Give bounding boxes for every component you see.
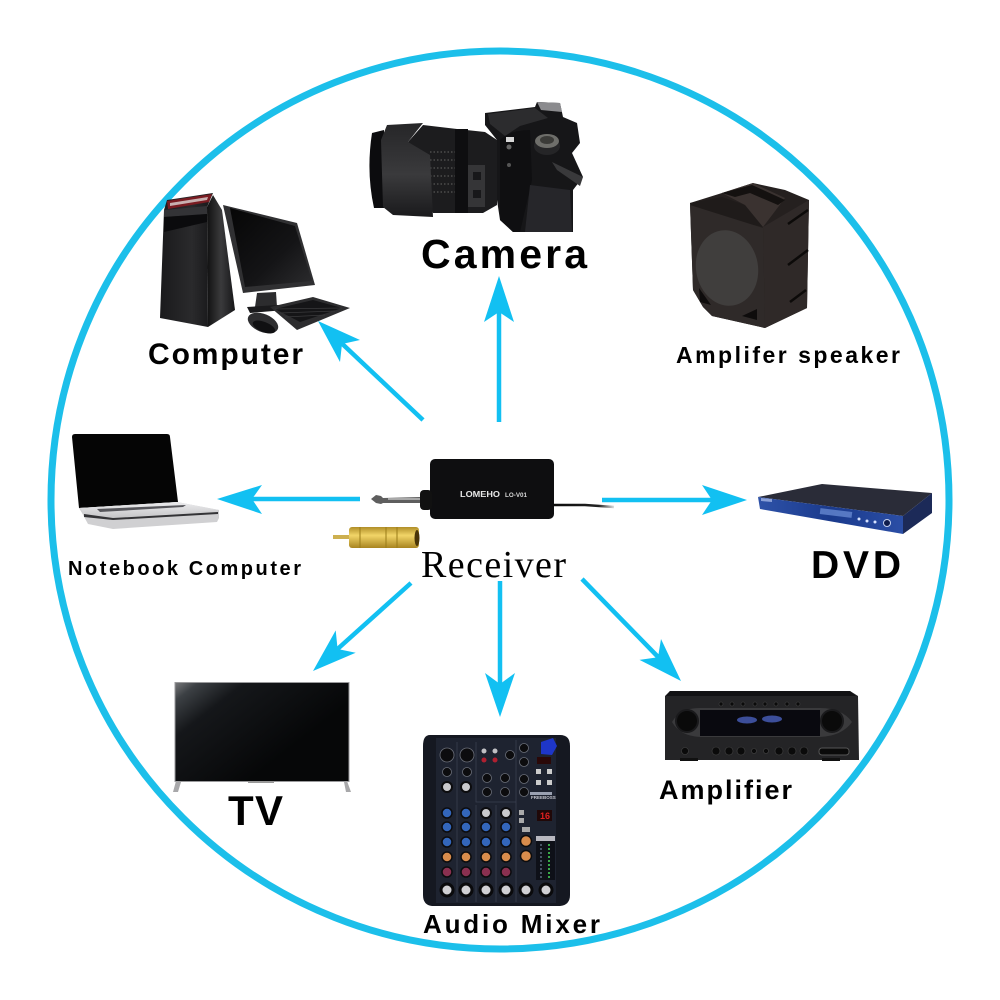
icon: audio mixer: FREEBOSS: [531, 795, 556, 800]
icon: receiver device: LOMEHO: [460, 489, 500, 499]
title: notebook computer: Notebook Computer: [68, 558, 301, 580]
title: TV: TV: [228, 787, 283, 834]
icon: receiver device: LO-V01: [505, 492, 527, 499]
title: receiver: Receiver: [421, 544, 566, 586]
icon: audio mixer: 16: [540, 811, 550, 821]
icon: notebook computer: [72, 434, 219, 529]
icon: TV: [173, 682, 351, 792]
title: DVD: DVD: [811, 544, 901, 587]
arrow: receiver to audio mixer: [485, 581, 515, 717]
icon: computer: [160, 193, 350, 337]
arrow: receiver to DVD: [602, 485, 747, 515]
icon: camera: [369, 102, 583, 232]
title: amplifer speaker: Amplifer speaker: [676, 342, 900, 368]
icon: receiver device: [371, 459, 614, 519]
arrow: receiver to amplifier: [582, 579, 681, 681]
arrow: receiver to TV: [313, 583, 411, 671]
title: audio mixer: Audio Mixer: [423, 909, 600, 939]
icon: audio mixer: [423, 735, 570, 906]
title: computer: Computer: [148, 338, 303, 371]
icon: amplifier: [665, 691, 859, 761]
icon: DVD player: [758, 484, 932, 534]
arrow: receiver to camera: [484, 276, 514, 422]
arrow: receiver to notebook computer: [217, 485, 360, 514]
title: camera: Camera: [421, 231, 588, 277]
arrow: receiver to computer: [318, 321, 423, 420]
icon: amplifier speaker: [690, 183, 809, 328]
icon: gold adapter: [333, 527, 420, 548]
title: amplifier: Amplifier: [659, 775, 792, 805]
